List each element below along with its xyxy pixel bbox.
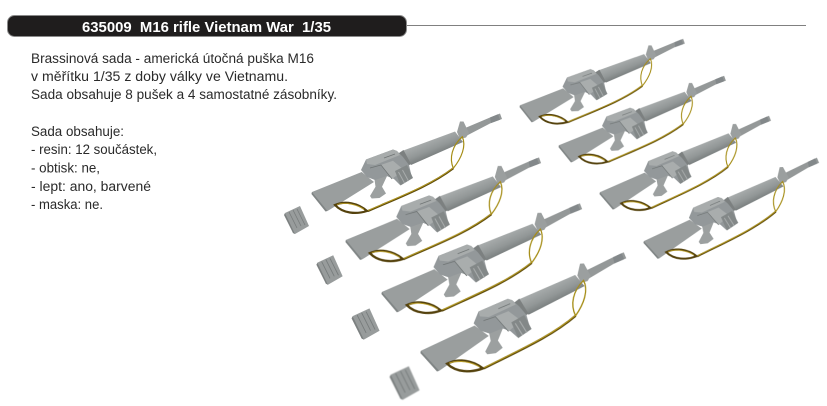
- magazine 1: [284, 206, 309, 234]
- contents list: - lept: ano, barvené: [31, 179, 151, 194]
- description text: [31, 51, 337, 102]
- magazine 4: [390, 366, 420, 400]
- contents list: - maska: ne.: [31, 197, 103, 212]
- contents list: - obtisk: ne,: [31, 160, 100, 176]
- rifle 6 (right column): [558, 76, 726, 164]
- rifle 1 (left column, top): [312, 114, 502, 213]
- rifle 3 (left column): [379, 203, 585, 314]
- contents list: - resin: 12 součástek,: [31, 142, 157, 157]
- rifle 5 (right column, top): [519, 37, 685, 125]
- rifle 4 (left column, bottom): [415, 252, 632, 374]
- title bar: [8, 16, 406, 36]
- title: 635009 M16 rifle Vietnam War 1/35: [82, 20, 331, 36]
- rifle 7 (right column): [597, 116, 773, 211]
- magazine 2: [316, 255, 343, 285]
- description text: v měřítku 1/35 z doby války ve Vietnamu.: [31, 69, 288, 84]
- rifle 2 (left column): [345, 157, 542, 261]
- header rule: [407, 24, 806, 26]
- description text: Brassinová sada - americká útočná puška M16: [31, 51, 314, 66]
- magazine 3: [352, 308, 380, 340]
- contents list: Sada obsahuje:: [31, 124, 124, 139]
- description text: Sada obsahuje 8 pušek a 4 samostatné zásobníky.: [31, 87, 337, 102]
- rifle 8 (right column, bottom): [639, 158, 824, 261]
- contents list: [31, 124, 157, 212]
